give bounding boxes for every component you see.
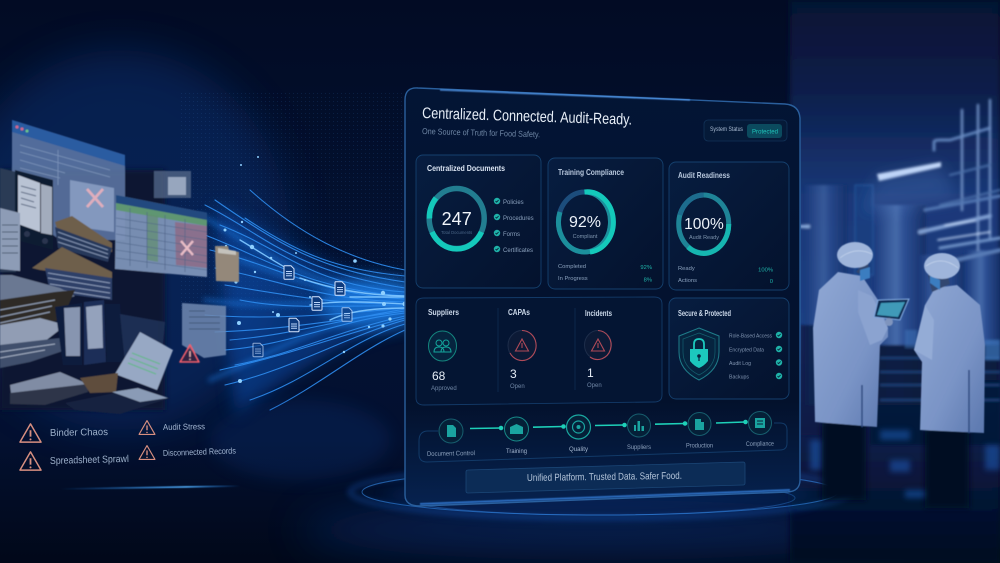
tagline banner <box>466 462 745 493</box>
donut chart: 100% <box>679 195 729 253</box>
step: Training: Training <box>506 448 527 455</box>
suppliers stat: 68 <box>432 369 446 383</box>
incidents stat <box>584 309 612 389</box>
left scene: binder chaos and spreadsheet sprawl <box>0 120 239 414</box>
icon: red warning triangle <box>180 345 199 362</box>
donut chart: 100%: Audit Ready <box>689 235 719 241</box>
pile shadow <box>0 170 165 410</box>
panel: training compliance <box>548 158 663 289</box>
stats rows: 100% <box>758 268 773 274</box>
alert: Spreadsheet Sprawl: Spreadsheet Sprawl <box>50 454 129 467</box>
factory scene background <box>790 0 1000 563</box>
donut chart: 100%: 100% <box>684 216 724 233</box>
panel: secure and protected <box>669 298 789 399</box>
alert: Disconnected Records <box>139 445 236 459</box>
CAPAs stat: CAPAs <box>508 308 530 317</box>
donut chart: 92%: Compliant <box>573 234 598 240</box>
legend: Certificates <box>503 248 533 254</box>
flowing data streams <box>200 190 430 415</box>
legend: Policies <box>503 200 524 206</box>
legend <box>494 198 534 254</box>
connector arrows <box>470 420 747 430</box>
alert: Spreadsheet Sprawl <box>20 452 129 470</box>
step: Quality <box>566 415 590 453</box>
donut chart: 247 <box>429 188 484 249</box>
step: Document Control: Document Control <box>427 450 476 458</box>
alert: Disconnected Records: Disconnected Records <box>163 445 236 458</box>
platform glow rings <box>350 466 850 518</box>
security checklist: Audit Log <box>729 361 751 367</box>
alert: Audit Stress <box>139 421 205 434</box>
security checklist: Backups <box>729 374 749 380</box>
problem list <box>20 421 236 470</box>
desk papers <box>10 372 170 414</box>
loose report sheet <box>115 332 173 390</box>
system status <box>704 120 787 141</box>
floating folder <box>215 246 239 282</box>
worker left <box>813 242 888 500</box>
process flow <box>419 412 787 462</box>
step: Compliance: Compliance <box>746 441 774 448</box>
panel: secure and protected: Secure & Protected <box>678 309 731 318</box>
panel: glass dashboard <box>405 88 800 506</box>
tablet <box>874 299 909 326</box>
spreadsheet window <box>115 195 207 277</box>
stats rows: Completed <box>558 264 586 270</box>
floor glow <box>60 400 390 489</box>
floating small card <box>154 171 191 198</box>
alert: Binder Chaos: Binder Chaos <box>50 427 108 439</box>
stats rows <box>558 264 652 284</box>
stats rows <box>678 266 773 285</box>
ceiling lamp <box>860 162 960 215</box>
browser window <box>12 120 125 240</box>
panel: centralized documents <box>416 155 541 288</box>
stats rows: 0 <box>770 279 773 285</box>
alert: Audit Stress: Audit Stress <box>163 421 205 432</box>
panel: training compliance: Training Compliance <box>558 167 624 177</box>
security checklist <box>729 332 782 380</box>
worker right <box>914 253 985 508</box>
stream particles <box>224 156 408 383</box>
step: Training <box>504 417 528 455</box>
system status: Protected <box>752 128 778 136</box>
alert: Binder Chaos <box>20 424 108 442</box>
floating document with warning <box>182 303 226 358</box>
CAPAs stat: 3 <box>510 367 517 381</box>
blue binders row <box>55 300 165 375</box>
step: Quality: Quality <box>569 446 589 453</box>
CAPAs stat <box>508 308 536 390</box>
step: Compliance <box>746 412 774 448</box>
security checklist: Role-Based Access <box>729 334 772 340</box>
step: Production: Production <box>686 442 713 450</box>
panel: audit readiness: Audit Readiness <box>678 170 730 180</box>
panel: suppliers, CAPAs, incidents <box>416 297 662 405</box>
legend: Forms <box>503 232 520 238</box>
suppliers stat <box>428 308 459 392</box>
stats rows: In Progress <box>558 276 588 282</box>
incidents stat: Incidents <box>585 309 612 318</box>
step: Production <box>686 412 713 450</box>
subtitle: One Source of Truth for Food Safety. <box>422 126 540 139</box>
suppliers stat: Approved <box>431 386 457 392</box>
legend: Procedures <box>503 216 534 222</box>
stats rows: 92% <box>640 265 652 271</box>
CAPAs stat: Open <box>510 384 525 390</box>
sheet stack <box>0 275 75 368</box>
upright binders <box>0 168 53 272</box>
system status: System Status <box>710 127 743 133</box>
incidents stat: 1 <box>587 366 594 380</box>
donut chart: 247: Total Documents <box>441 230 472 235</box>
paper stack upper <box>32 216 112 300</box>
step: Suppliers: Suppliers <box>627 444 652 451</box>
incidents stat: Open <box>587 383 602 389</box>
flowing document icons <box>253 266 352 357</box>
donut chart: 92%: 92% <box>569 214 601 231</box>
tagline banner: Unified Platform. Trusted Data. Safer Food. <box>527 471 682 484</box>
food safety workers with tablet <box>813 242 985 508</box>
pipework <box>920 100 1000 265</box>
step: Document Control <box>427 419 476 458</box>
step: Suppliers <box>627 414 652 451</box>
title: Centralized. Connected. Audit-Ready. <box>422 105 632 129</box>
stats rows: Actions <box>678 278 697 284</box>
donut chart: 247: 247 <box>442 209 472 229</box>
stats rows: 8% <box>644 278 652 284</box>
suppliers stat: Suppliers <box>428 308 459 317</box>
icon: shield with padlock <box>679 328 719 380</box>
donut chart: 92% <box>558 192 613 252</box>
stats rows: Ready <box>678 266 695 272</box>
floor reflections <box>810 430 1000 498</box>
panel: audit readiness <box>669 162 789 290</box>
security checklist: Encrypted Data <box>729 348 765 354</box>
panel: centralized documents: Centralized Documents <box>427 163 505 173</box>
